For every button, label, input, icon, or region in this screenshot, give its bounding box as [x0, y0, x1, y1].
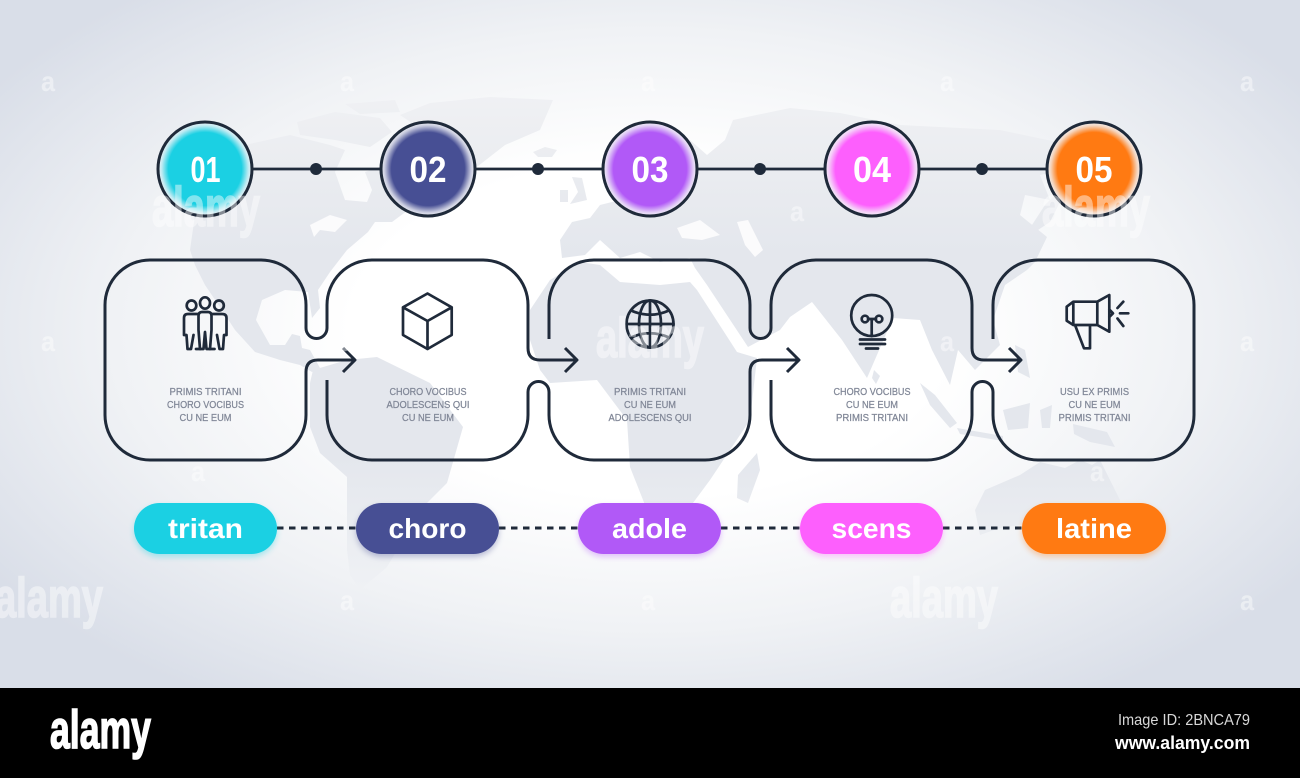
step 3 description: CU NE EUM [624, 399, 676, 411]
stock watermarks: a [41, 326, 55, 357]
dashed connectors between labels [277, 526, 1022, 530]
world map [190, 97, 1120, 590]
step 4 description: CHORO VOCIBUS [834, 386, 910, 398]
timeline connector [205, 163, 1094, 175]
stock watermarks: a [1090, 456, 1104, 487]
step 3 description: ADOLESCENS QUI [608, 412, 692, 424]
inland seas [310, 215, 763, 257]
icon: megaphone [1067, 295, 1128, 348]
step 3 description [608, 386, 692, 424]
label pill: scens [800, 503, 943, 554]
label pill: tritan: tritan [168, 513, 243, 544]
stock watermarks: alamy [152, 175, 260, 238]
step 2 number badge [381, 122, 475, 216]
label pill: latine [1022, 503, 1166, 554]
Indonesia and Philippines [920, 345, 1115, 447]
stock watermarks: alamy [596, 306, 704, 369]
icon: light bulb [851, 295, 892, 348]
step 5 description: PRIMIS TRITANI [1058, 412, 1130, 424]
stock watermarks: a [1240, 66, 1254, 97]
Iceland [533, 147, 557, 157]
step 1 description: PRIMIS TRITANI [170, 386, 242, 398]
Britain and Ireland [560, 177, 587, 204]
stock watermarks: a [191, 456, 205, 487]
South America [310, 357, 463, 590]
label pill: choro: choro [388, 513, 466, 544]
Eurasia [560, 108, 1100, 385]
Australia [975, 460, 1120, 542]
arrowheads [343, 348, 1021, 372]
step 1 number badge: 01 [190, 149, 220, 190]
stock watermarks: a [340, 66, 354, 97]
stock watermarks: alamy [1042, 175, 1150, 238]
label pill: adole: adole [612, 513, 687, 544]
stock watermarks: a [641, 66, 655, 97]
Japan [1030, 190, 1062, 232]
Canadian islands [297, 100, 400, 147]
icon: people [184, 297, 226, 349]
Africa [530, 262, 757, 538]
stock watermarks: a [940, 66, 954, 97]
step 4 number badge [825, 122, 919, 216]
flow outline of connected boxes [105, 260, 1194, 460]
label pill: tritan [134, 503, 277, 554]
footer url: www.alamy.com [1114, 733, 1250, 753]
step 1 description [167, 386, 244, 424]
step 3 description: PRIMIS TRITANI [614, 386, 686, 398]
label pill: scens: scens [832, 513, 912, 544]
stock watermarks: a [1240, 326, 1254, 357]
step 5 description: CU NE EUM [1068, 399, 1120, 411]
Sri Lanka [872, 370, 880, 384]
stock watermarks: a [490, 196, 504, 227]
stock watermarks: a [940, 326, 954, 357]
step 5 number badge: 05 [1076, 149, 1112, 190]
step 1 number badge [158, 122, 252, 216]
step 2 description: CU NE EUM [402, 412, 454, 424]
step 3 number badge: 03 [632, 149, 668, 190]
stock watermarks [0, 66, 1254, 629]
image id: Image ID: 2BNCA79 [1118, 712, 1250, 729]
footer logo: alamy [50, 700, 151, 760]
footer bar [0, 688, 1300, 778]
stock watermarks: a [490, 456, 504, 487]
step 3 number badge [603, 122, 697, 216]
step 1 description: CU NE EUM [180, 412, 232, 424]
step 5 number badge [1047, 122, 1141, 216]
step 1 description: CHORO VOCIBUS [167, 399, 244, 411]
icon: globe [626, 300, 674, 348]
step 2 description: ADOLESCENS QUI [386, 399, 470, 411]
step 5 description [1058, 386, 1130, 424]
stock watermarks: a [340, 326, 354, 357]
stock watermarks: a [790, 456, 804, 487]
stock watermarks: a [340, 585, 354, 616]
step 2 description: CHORO VOCIBUS [390, 386, 466, 398]
label pill: adole [578, 503, 721, 554]
step 4 description: PRIMIS TRITANI [836, 412, 908, 424]
label pill: choro [356, 503, 499, 554]
connector dots [310, 163, 988, 175]
label pill: latine: latine [1056, 513, 1132, 544]
icon: cube [403, 294, 452, 349]
Madagascar [737, 453, 760, 503]
step 2 description [386, 386, 470, 424]
step 4 number badge: 04 [853, 149, 891, 190]
step 4 description [834, 386, 910, 424]
stock watermarks: alamy [890, 566, 998, 629]
step 5 description: USU EX PRIMIS [1060, 386, 1129, 398]
step 4 description: CU NE EUM [846, 399, 898, 411]
stock watermarks: a [790, 196, 804, 227]
North America [190, 135, 420, 372]
stock watermarks: a [41, 66, 55, 97]
stock watermarks: a [1240, 585, 1254, 616]
step 2 number badge: 02 [410, 149, 446, 190]
stock watermarks: a [641, 585, 655, 616]
Greenland [400, 97, 553, 170]
